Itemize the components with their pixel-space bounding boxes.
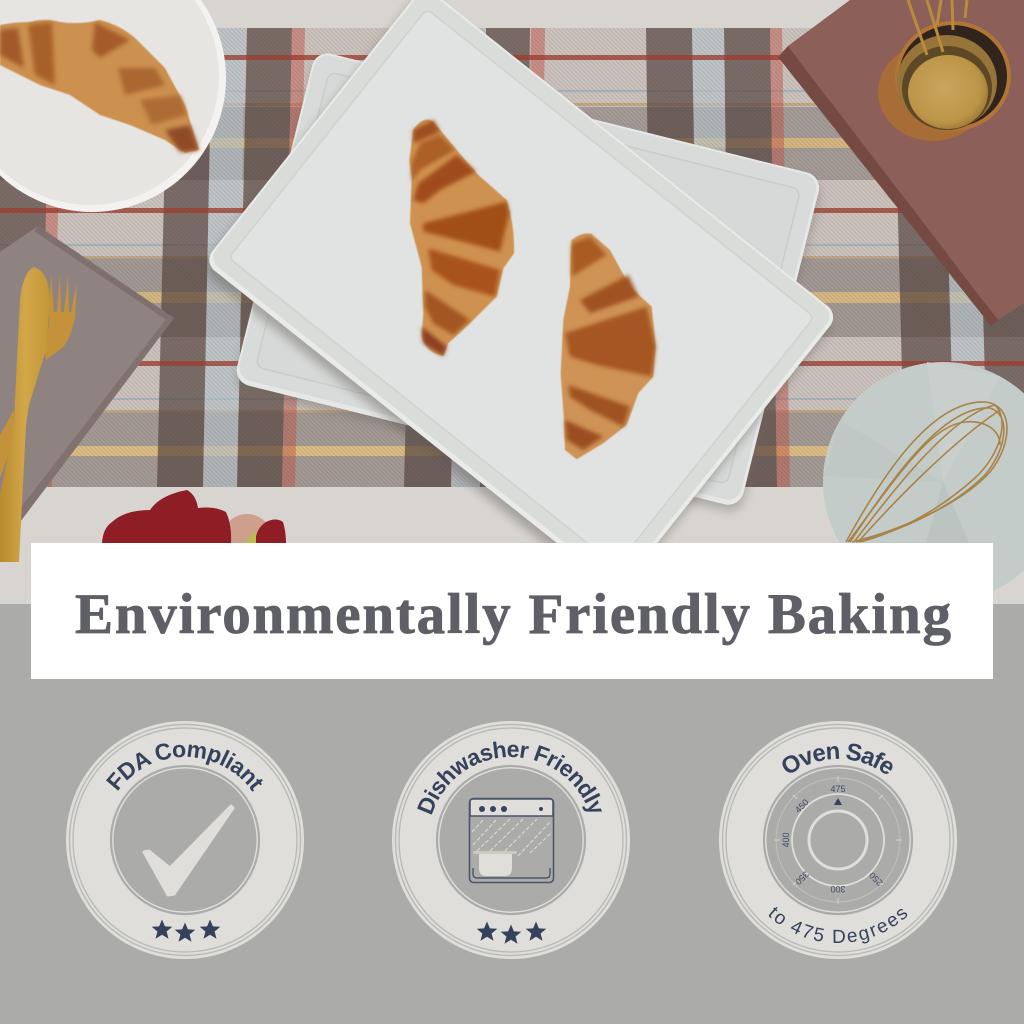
photo: baking trays on a table [0,0,1024,604]
badge heading: Dishwasher Friendly [417,742,602,815]
title: Environmentally Friendly Baking [75,583,951,646]
croissant on tray, right [561,233,656,459]
three stars [477,922,546,944]
measuring cups [878,0,1011,141]
book [778,0,1024,326]
badge: Dishwasher Friendly [392,721,630,959]
icon: temperature dial: 400 [781,832,791,848]
red flower [102,490,286,550]
croissant on tray, left [409,120,514,356]
upper baking tray [199,0,840,599]
icon: temperature dial: 250 [867,870,885,888]
title banner [31,543,993,679]
badge: FDA Compliant [66,721,304,959]
badge: Oven Safe [719,721,957,959]
icon: temperature dial [774,776,902,904]
icon: temperature dial: 350 [793,869,811,887]
grey trivet disk [823,362,1024,602]
gold knife [0,267,50,562]
folded napkin [0,226,174,522]
icon: temperature dial: 450 [793,797,811,815]
icon: temperature dial: 300 [830,884,846,894]
gold whisk [846,402,1007,542]
three stars [152,920,220,942]
white plate [0,0,226,212]
lower grey panel [0,604,1024,1024]
croissant on plate [0,20,199,153]
badge subheading: to 475 Degrees [768,907,908,944]
badge heading: FDA Compliant [106,744,263,792]
plaid table runner [0,28,1024,487]
icon: temperature dial: 475 [830,784,846,794]
icon: check mark [144,806,233,895]
icon: oven with pot [470,798,554,882]
gold fork [0,273,77,478]
lower baking tray [232,50,824,514]
badge heading: Oven Safe [782,744,892,774]
